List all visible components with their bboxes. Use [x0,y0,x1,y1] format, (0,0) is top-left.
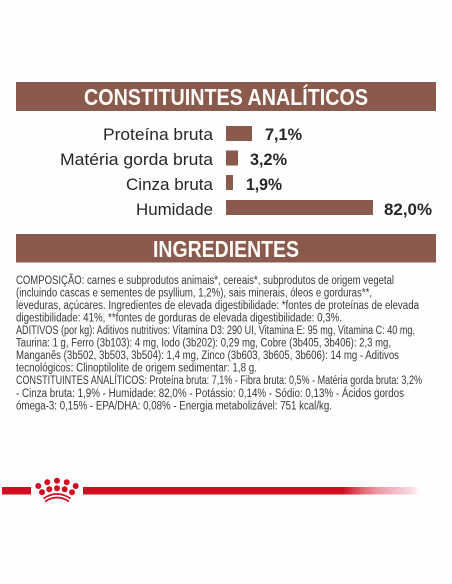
bar row: proteína bruta: 7,1% [265,126,302,144]
heading banner: ingredientes: INGREDIENTES [153,236,299,262]
panel: ingredientes [16,234,436,412]
heading banner: ingredientes [16,234,436,262]
text block: composição, aditivos, constituintes: digestibilidade: 41%, **fontes de gorduras de elevada digestibilidade: 0,3%. [16,312,342,324]
red line left [2,487,31,494]
bar row: cinza bruta: Cinza bruta [126,176,214,194]
bar row: humidade: 82,0% [384,201,432,219]
footer brand strip [2,478,420,502]
bar row: proteína bruta: Proteína bruta [103,126,214,144]
panel: constituintes analíticos [16,82,436,219]
bar row: humidade: Humidade [136,201,213,219]
text block: composição, aditivos, constituintes: ómega-3: 0,15% - EPA/DHA: 0,08% - Energia metabolizável: 751 kcal/kg. [16,400,332,412]
bar row: matéria gorda bruta: 3,2% [250,151,287,169]
bar row: cinza bruta: 1,9% [246,176,282,194]
bar row: matéria gorda bruta: Matéria gorda bruta [60,151,214,169]
bar chart [60,126,432,219]
text block: composição, aditivos, constituintes: (incluindo cascas e sementes de psyllium, 1,2%), sais minerais, óleos e gorduras**, [16,288,372,300]
text block: composição, aditivos, constituintes [16,274,422,412]
icon: royal canin crown [35,478,79,502]
bar row: cinza bruta [126,175,282,194]
bar row: matéria gorda bruta [60,150,287,169]
red line fading right [83,487,420,494]
bar row: proteína bruta [103,126,302,144]
text block: composição, aditivos, constituintes: tecnológicos: Clinoptilolite de origem sedimentar: 1,8 g. [16,362,257,374]
bar row: humidade [136,200,432,219]
heading banner: constituintes analíticos: CONSTITUINTES ANALÍTICOS [84,83,368,110]
